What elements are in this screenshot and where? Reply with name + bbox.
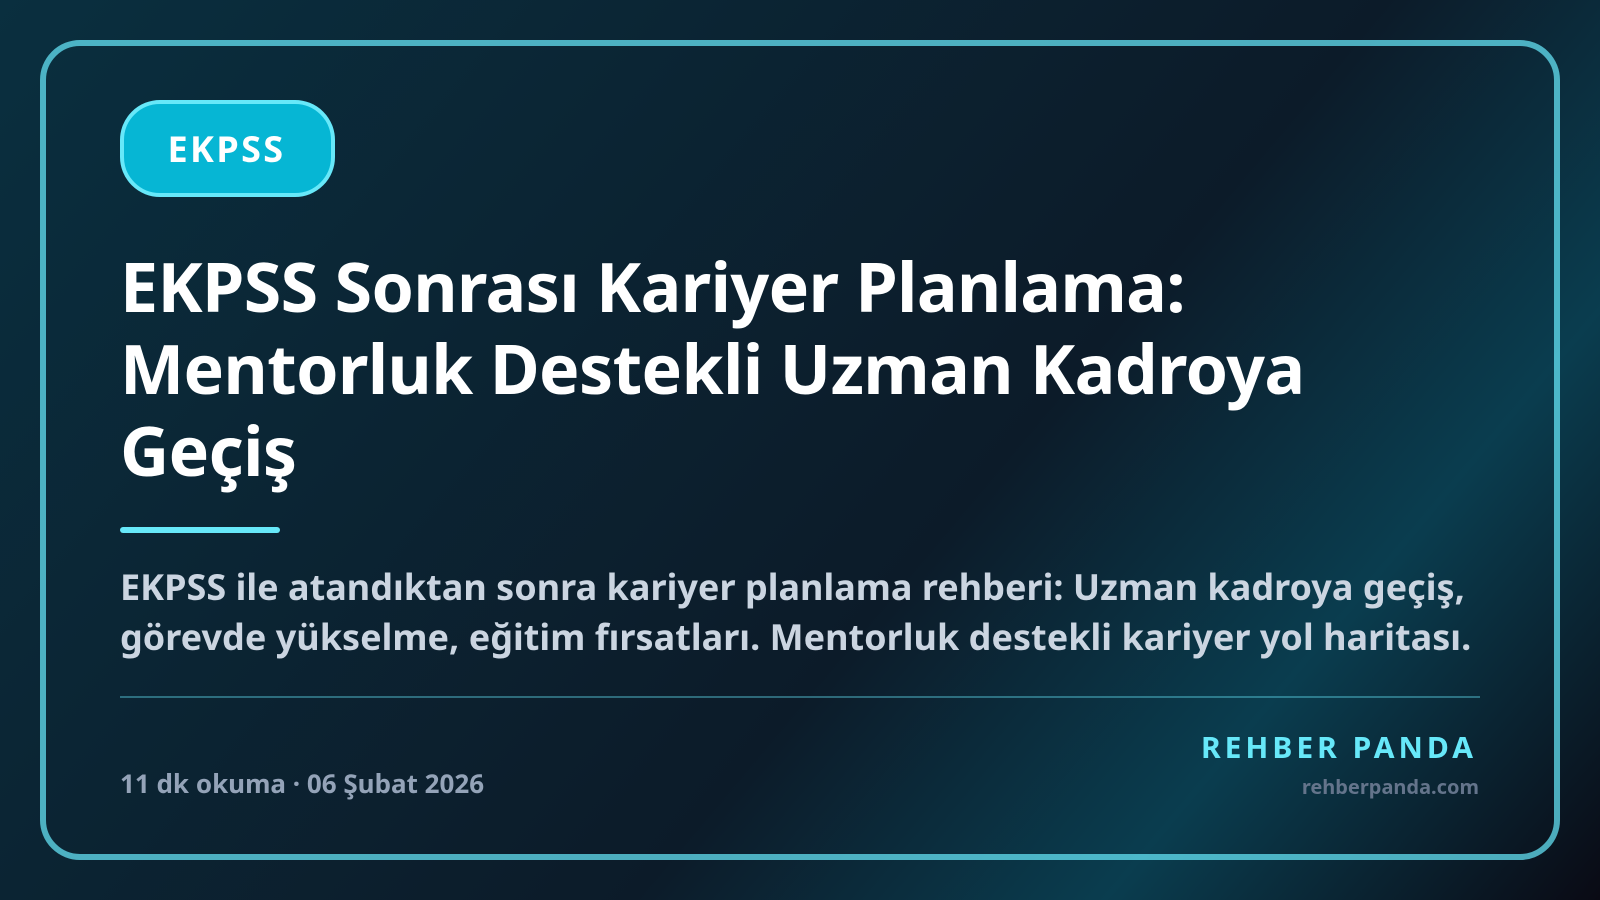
subtitle: görevde yükselme, eğitim fırsatları. Mentorluk destekli kariyer yol haritası.	[120, 612, 1471, 661]
title: EKPSS Sonrası Kariyer Planlama:	[120, 239, 1185, 332]
brand url: rehberpanda.com	[1302, 773, 1479, 800]
divider	[120, 696, 1480, 698]
accent line	[120, 527, 280, 533]
badge: EKPSS: EKPSS	[167, 124, 286, 173]
title	[120, 239, 1305, 496]
title: Geçiş	[120, 403, 296, 496]
badge: EKPSS	[120, 100, 335, 197]
title: Mentorluk Destekli Uzman Kadroya	[120, 321, 1305, 414]
meta: reading time and date: 11 dk okuma · 06 Şubat 2026	[120, 765, 484, 801]
brand name: REHBER PANDA	[1201, 726, 1477, 767]
subtitle	[120, 562, 1471, 661]
subtitle: EKPSS ile atandıktan sonra kariyer planlama rehberi: Uzman kadroya geçiş,	[120, 562, 1465, 611]
